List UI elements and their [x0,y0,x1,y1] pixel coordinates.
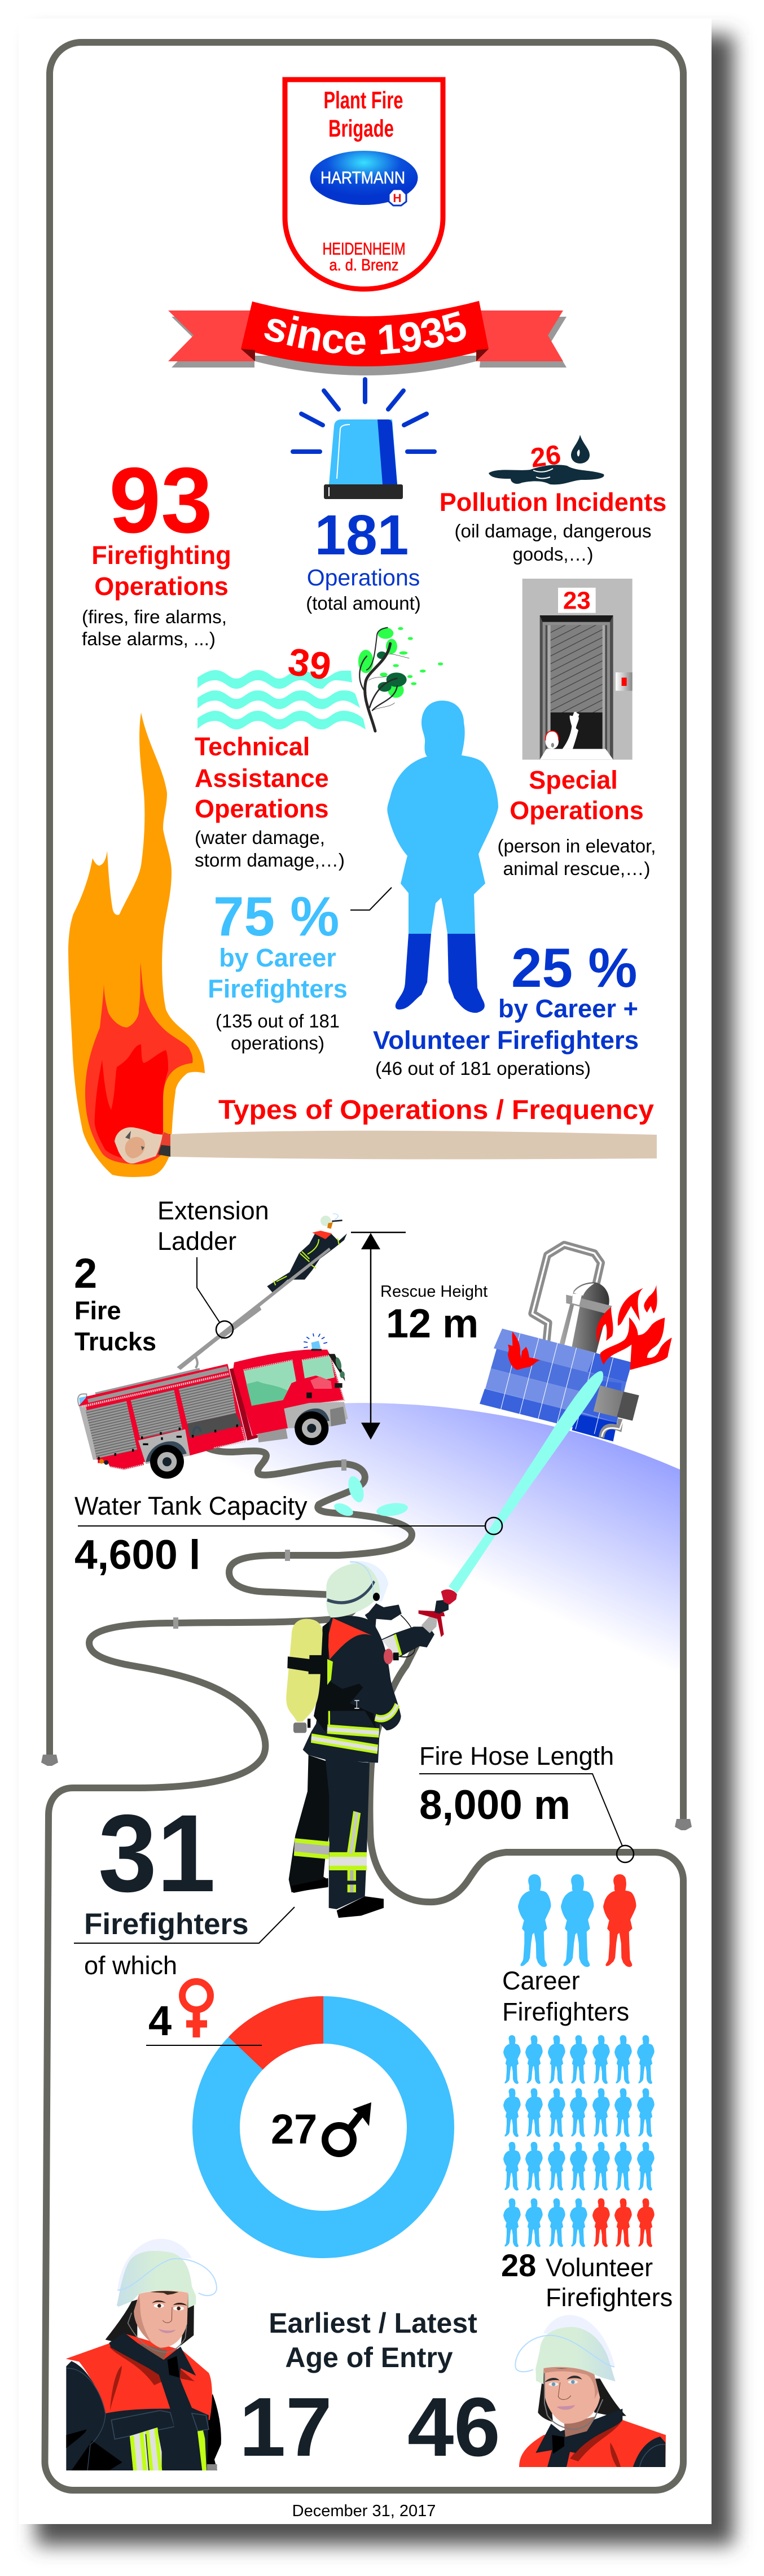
stat: rescue height [380,1283,488,1346]
icon: siren [293,379,434,499]
stat: fire hose length [419,1742,634,1862]
stat: 93 firefighting operations: Operations [94,572,229,601]
stat: 27 male [271,2102,371,2154]
small H emblem: H [393,192,402,205]
stat: technical assistance: Technical [195,732,310,761]
stat: 4 female [146,1982,262,2045]
date footer: December 31, 2017 [292,2502,436,2520]
label: career firefighters: Career [502,1966,580,1995]
career firefighter icons [518,1874,636,1967]
stat: pollution incidents [440,488,666,565]
stat: 4 female: 4 [148,1997,172,2044]
stat: 2 fire trucks: Fire [74,1296,121,1325]
label: career firefighters: Firefighters [502,1997,629,2026]
stat: 2 fire trucks: Trucks [74,1327,156,1356]
banner: since 1935 [168,301,567,375]
heading: types of operations: Types of Operations / Frequency [218,1095,654,1125]
logo heading [324,87,403,142]
callout: extension ladder: Ladder [157,1227,236,1256]
callout: water tank capacity: Water Tank Capacity [74,1492,308,1520]
hose couplings on frame ends [41,1755,692,1830]
water jet [449,1371,603,1593]
stat: 181 operations: (total amount) [306,593,421,614]
callout: extension ladder: Extension [157,1196,269,1225]
location text [323,239,405,274]
donut chart: gender split [216,1996,431,2234]
number 26: 26 [529,440,563,474]
stat: 25 percent: Volunteer Firefighters [373,1026,639,1055]
stat: 93 firefighting operations: (fires, fire alarms, [82,606,227,627]
logo heading: Brigade [328,115,394,142]
icon: burning match [68,712,657,1177]
number 39: 39 [286,640,333,688]
ladder firefighter [177,1214,347,1370]
volunteer firefighter icons [503,2035,655,2247]
stat: 31 firefighters: of which [84,1951,177,1980]
stat: technical assistance: Assistance [195,764,329,793]
icon: tree in storm [358,627,443,731]
stat: 93 firefighting operations: Firefighting [91,541,231,570]
fire hose [45,1428,683,2490]
small H emblem [389,189,406,205]
stat: 75 percent: (135 out of 181 [216,1011,340,1031]
callout: water tank capacity: 4,600 l [74,1532,200,1578]
HARTMANN word: HARTMANN [320,168,405,187]
heading: earliest latest age of entry: Age of Entry [285,2342,453,2373]
stat: fire hose length: 8,000 m [419,1782,570,1828]
banner text: since 1935 [264,311,466,355]
stat: 27 male: 27 [271,2106,317,2153]
water droplets [332,1474,409,1519]
stat: 93 firefighting operations [82,448,231,649]
stat: technical assistance: storm damage,…) [195,850,345,871]
number 17: 17 [239,2381,332,2474]
location text: a. d. Brenz [330,256,398,274]
icon: oil spill [489,435,604,484]
stat: 2 fire trucks: 2 [74,1250,97,1297]
heading: earliest latest age of entry: Earliest / Latest [269,2307,477,2339]
stat: 25 percent: (46 out of 181 operations) [375,1058,591,1079]
stat: 93 firefighting operations: 93 [109,448,213,552]
stat: 181 operations: 181 [315,504,409,567]
portrait: latest age firefighter [515,2315,666,2467]
stat: 181 operations [306,504,421,614]
stat: 2 fire trucks [74,1250,156,1356]
stat: 25 percent: 25 % [511,937,637,999]
stat: 31 firefighters: Firefighters [84,1908,249,1941]
heading: earliest latest age of entry [269,2307,477,2373]
figure: career vs volunteer split [387,701,498,1013]
callout: water tank capacity [74,1492,502,1578]
stat: 75 percent: operations) [231,1033,324,1053]
label: 28 volunteer firefighters: 28 [501,2247,536,2283]
number 23: 23 [563,587,591,614]
location text: HEIDENHEIM [323,239,405,259]
globe background [53,1403,680,1863]
hose couplings [173,1459,346,1629]
stat: special operations: animal rescue,…) [503,858,650,879]
portrait: earliest age firefighter [66,2239,221,2470]
frame: top hose border [50,42,683,1821]
stat: 75 percent [208,885,348,1053]
number 46: 46 [407,2381,500,2474]
arrow: rescue height [351,1232,406,1440]
stat: rescue height: Rescue Height [380,1283,488,1301]
stat: 181 operations: Operations [307,565,420,591]
icon: elevator [522,579,633,760]
stat: pollution incidents: goods,…) [512,544,594,565]
callout: extension ladder [157,1196,269,1338]
label: 28 volunteer firefighters: Volunteer [546,2253,653,2282]
icon: fire truck [78,1333,348,1479]
stat: technical assistance [195,732,345,871]
stat: pollution incidents: Pollution Incidents [440,488,666,517]
stat: 75 percent: Firefighters [208,974,348,1003]
stat: 75 percent: 75 % [213,885,339,947]
stat: special operations: Operations [510,796,644,825]
stat: special operations [498,766,656,879]
stat: 75 percent: by Career [219,943,336,972]
stat: special operations: (person in elevator, [498,836,656,856]
stat: 93 firefighting operations: false alarms, ...) [82,628,216,649]
logo heading: Plant Fire [324,87,403,114]
callout line [350,887,392,910]
stat: 25 percent: by Career + [498,994,638,1023]
label: 28 volunteer firefighters: Firefighters [546,2283,673,2312]
stat: rescue height: 12 m [386,1301,478,1346]
stat: special operations: Special [529,766,618,794]
shield logo [285,80,443,289]
label: 28 volunteer firefighters [501,2247,673,2312]
firefighter with hose [286,1561,457,1918]
icon: waves [197,670,366,729]
stat: technical assistance: Operations [195,794,329,823]
stat: 31 firefighters [74,1792,295,1980]
HARTMANN oval [310,151,418,205]
stat: 31 firefighters: 31 [98,1792,216,1915]
stat: 25 percent [373,937,639,1079]
label: career firefighters [502,1966,629,2026]
icon: burning plant [480,1245,672,1441]
stat: technical assistance: (water damage, [195,827,325,848]
stat: fire hose length: Fire Hose Length [419,1742,614,1770]
stat: pollution incidents: (oil damage, dangerous [455,521,651,541]
